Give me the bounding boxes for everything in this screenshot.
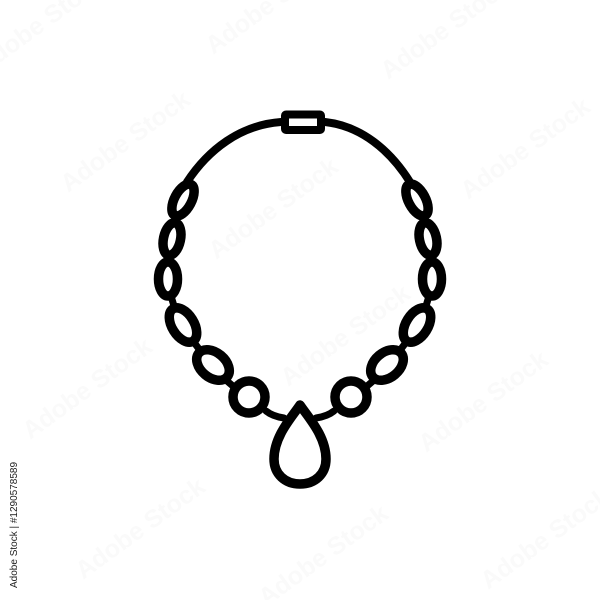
necklace icon [158,114,442,484]
pendant drop [274,405,326,484]
left beads [158,181,265,413]
right chain [325,122,410,182]
watermarks: Adobe Stock [17,332,157,445]
watermarks: Adobe Stock [55,85,195,198]
left chain [187,122,281,182]
watermarks: Adobe Stock [203,152,343,265]
clasp [285,114,321,130]
watermarks: Adobe Stock [455,92,595,205]
right beads [335,181,442,413]
stock id side text: Adobe Stock | #1290578589 [9,462,20,588]
watermarks: Adobe Stock [70,472,210,585]
connectors [171,296,429,418]
watermarks: Adobe Stock [413,345,553,458]
watermarks: Adobe Stock [275,279,415,392]
